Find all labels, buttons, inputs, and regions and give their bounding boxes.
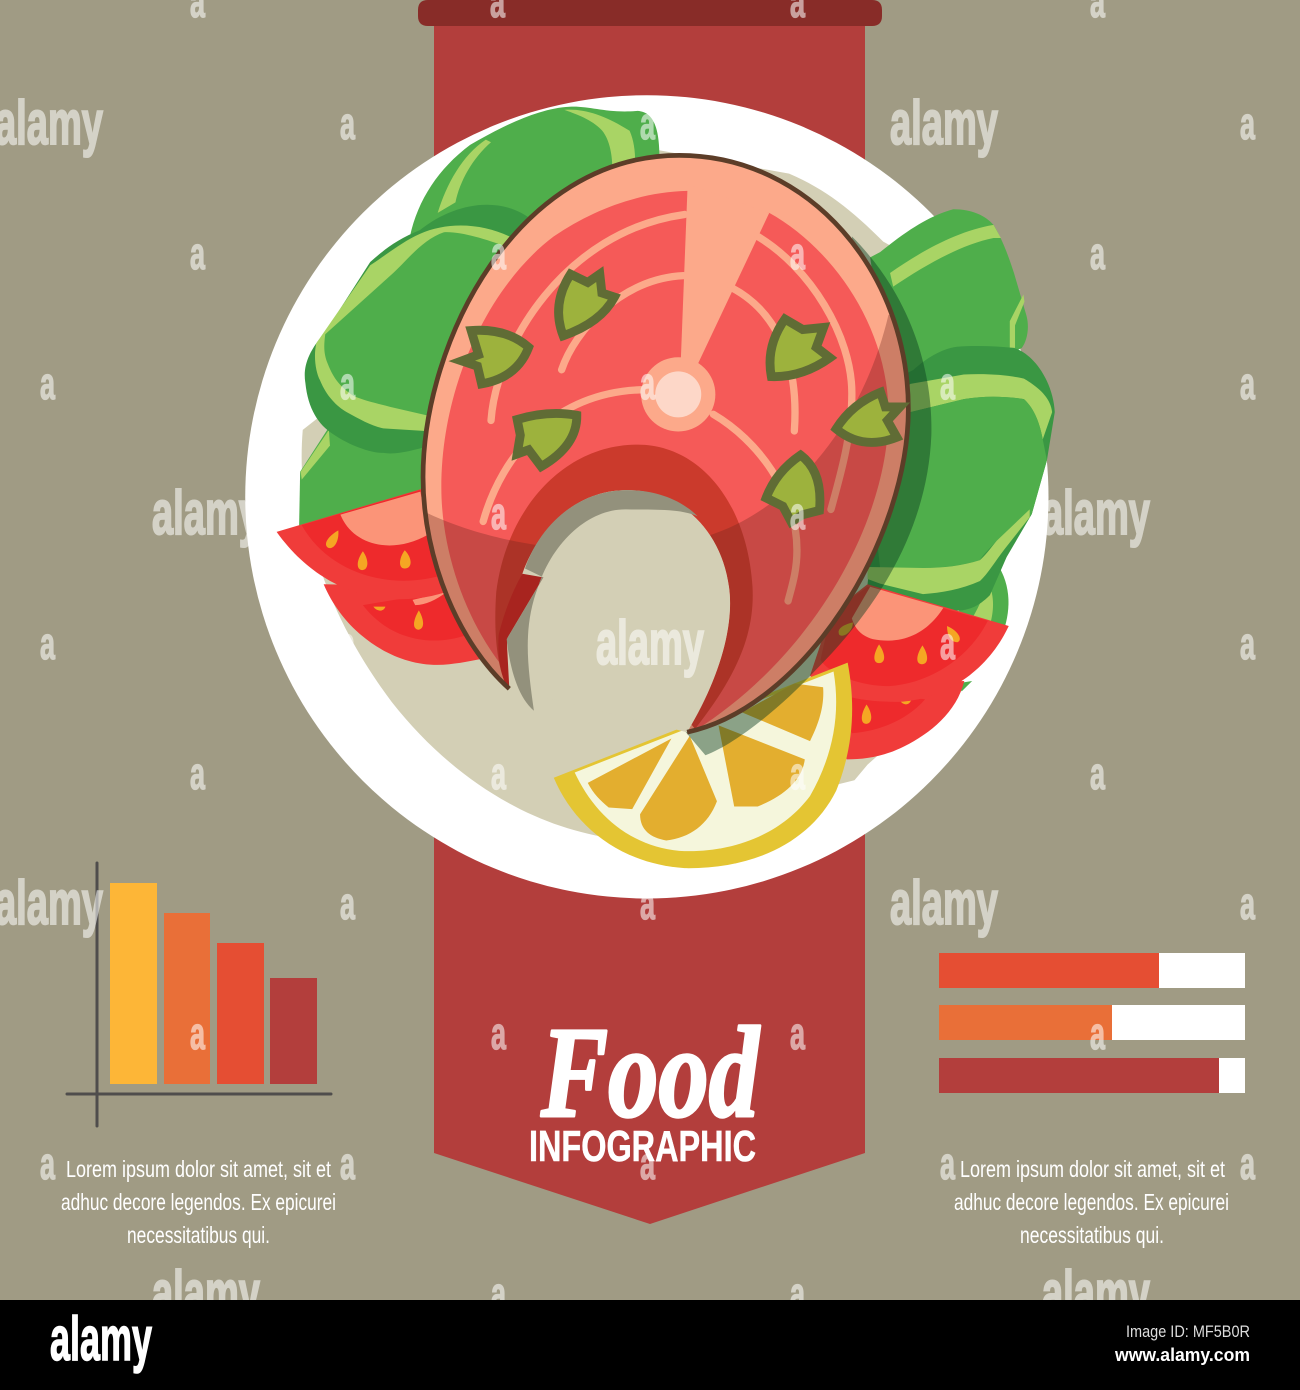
left caption: necessitatibus qui. <box>127 1222 270 1248</box>
watermark: a <box>40 1138 56 1189</box>
lettuce lower right <box>868 346 1055 611</box>
tomato seeds <box>373 607 423 630</box>
watermark: a <box>340 1138 356 1189</box>
tomato seeds <box>326 530 411 570</box>
watermark: a <box>1240 358 1256 409</box>
plate <box>245 95 1048 898</box>
bar chart <box>67 863 331 1126</box>
watermark: a <box>190 748 206 799</box>
left caption: Lorem ipsum dolor sit amet, sit et <box>66 1156 331 1182</box>
salmon spine wedge <box>681 184 769 365</box>
footer logo: alamy <box>50 1305 152 1374</box>
watermark: alamy <box>152 479 260 548</box>
bar chart axes <box>67 863 331 1126</box>
right caption <box>954 1156 1229 1248</box>
watermark: a <box>940 618 956 669</box>
salmon outline <box>423 155 908 732</box>
watermark: a <box>790 228 806 279</box>
watermark: alamy <box>0 89 103 158</box>
tomato seeds <box>839 622 960 664</box>
watermark: a <box>40 618 56 669</box>
herb flake top right <box>770 319 830 377</box>
watermark: a <box>190 1008 206 1059</box>
watermark: a <box>1240 98 1256 149</box>
tomato slice upper left <box>277 488 460 599</box>
salmon central cavity <box>507 490 730 732</box>
watermark: a <box>491 1008 507 1059</box>
progress bars <box>939 953 1245 1093</box>
progress bar three <box>939 1058 1245 1093</box>
right caption: Lorem ipsum dolor sit amet, sit et <box>960 1156 1225 1182</box>
watermark: a <box>491 748 507 799</box>
lemon segments <box>588 684 823 840</box>
herb flake middle left <box>517 413 577 467</box>
right caption: necessitatibus qui. <box>1020 1222 1164 1248</box>
watermark: alamy <box>890 869 998 938</box>
title <box>529 1001 761 1171</box>
herb flake lower right <box>766 455 820 522</box>
watermark: a <box>340 618 356 669</box>
watermark: a <box>1090 748 1106 799</box>
salmon central bone <box>641 357 715 431</box>
ribbon banner <box>418 0 882 1224</box>
salmon drop shadow <box>685 236 931 755</box>
watermark: a <box>491 488 507 539</box>
watermark: a <box>790 748 806 799</box>
progress bar one <box>939 953 1245 988</box>
lettuce middle left <box>305 205 533 453</box>
lemon slice <box>554 663 852 868</box>
salmon flesh <box>441 191 888 731</box>
watermark: a <box>340 358 356 409</box>
watermark: alamy <box>1042 479 1150 548</box>
left caption: adhuc decore legendos. Ex epicurei <box>61 1189 336 1215</box>
tomato slice lower right <box>828 681 964 759</box>
watermark: a <box>640 358 656 409</box>
watermark: a <box>40 358 56 409</box>
footer image id: Image ID: MF5B0R <box>1126 1322 1250 1341</box>
watermark: a <box>340 98 356 149</box>
watermark: a <box>1240 1138 1256 1189</box>
lettuce upper right <box>870 209 1028 414</box>
salmon veins <box>483 214 852 601</box>
watermark: a <box>491 228 507 279</box>
watermark: alamy <box>890 89 998 158</box>
salmon inner dark band <box>495 445 753 729</box>
tomato slice lower left <box>324 584 488 665</box>
watermark: a <box>1090 228 1106 279</box>
watermark: a <box>190 228 206 279</box>
footer bar <box>0 1300 1300 1390</box>
watermark: a <box>790 1008 806 1059</box>
watermark: a <box>790 1268 806 1319</box>
salmon red flap <box>498 574 543 689</box>
watermark: a <box>1090 1008 1106 1059</box>
watermark: alamy <box>1042 1259 1150 1328</box>
herb flake left <box>462 330 529 384</box>
left caption <box>61 1156 336 1248</box>
lettuce lowest right <box>956 558 1009 691</box>
plate of food illustration <box>245 95 1055 898</box>
footer url: www.alamy.com <box>1114 1345 1250 1365</box>
watermark: a <box>640 878 656 929</box>
plate shadow <box>302 150 988 839</box>
ribbon top bar <box>418 0 882 26</box>
lettuce top left <box>410 107 659 247</box>
herb flakes <box>462 274 900 522</box>
tomato slice upper right <box>810 584 1009 702</box>
watermark: a <box>940 358 956 409</box>
watermark: a <box>640 98 656 149</box>
tomato seeds <box>862 699 911 724</box>
watermark: alamy <box>152 1259 260 1328</box>
watermark: a <box>340 878 356 929</box>
title: Food <box>540 1001 761 1145</box>
title: INFOGRAPHIC <box>529 1122 756 1171</box>
herb flake right <box>836 392 900 442</box>
watermark: a <box>940 1138 956 1189</box>
cavity shadow <box>507 490 698 711</box>
watermark: alamy <box>596 609 704 678</box>
watermark: a <box>1240 878 1256 929</box>
herb flake top left <box>559 274 614 336</box>
watermark: a <box>640 1138 656 1189</box>
watermark: alamy <box>0 869 103 938</box>
progress bar two <box>939 1005 1245 1040</box>
watermark: a <box>491 1268 507 1319</box>
salmon steak <box>420 153 911 734</box>
salmon lower shading <box>428 314 906 730</box>
bar chart columns <box>110 883 317 1084</box>
watermark: a <box>790 488 806 539</box>
watermark: a <box>1240 618 1256 669</box>
lettuce lower left <box>299 425 444 527</box>
